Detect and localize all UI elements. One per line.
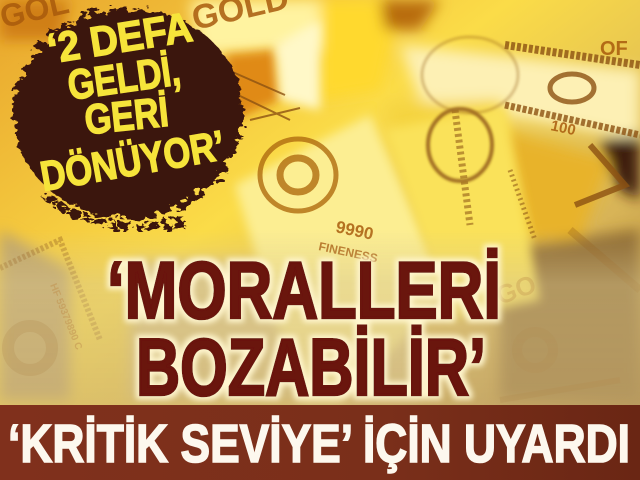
dark ink blot — [13, 8, 243, 227]
headline line 2: BOZABİLİR’ — [136, 323, 486, 413]
line: GERİ: GERİ — [82, 88, 171, 143]
line: GELDİ,: GELDİ, — [65, 47, 183, 109]
gold bar lettering: 100 — [549, 117, 577, 139]
headline line 1: ‘MORALLERİ — [107, 246, 501, 336]
gold bar lettering: GO — [492, 269, 540, 311]
blot quote text — [37, 3, 228, 200]
gold bar lettering — [0, 0, 628, 352]
gold bar face — [235, 115, 450, 405]
gold bar lettering: HF 59379890 C — [47, 282, 84, 352]
main headline — [107, 246, 501, 413]
lower haze over the photo — [0, 230, 640, 410]
gold bar lettering: OF — [600, 38, 628, 60]
gold bar lettering: FINENESS — [317, 239, 379, 265]
line: 2 DEFA: ‘2 DEFA — [44, 3, 196, 72]
bottom band — [0, 405, 640, 480]
bill and bar detail — [0, 37, 640, 400]
line: DÖNÜYOR: DÖNÜYOR’ — [37, 121, 228, 200]
gold bar lettering: 9990 — [334, 217, 375, 244]
